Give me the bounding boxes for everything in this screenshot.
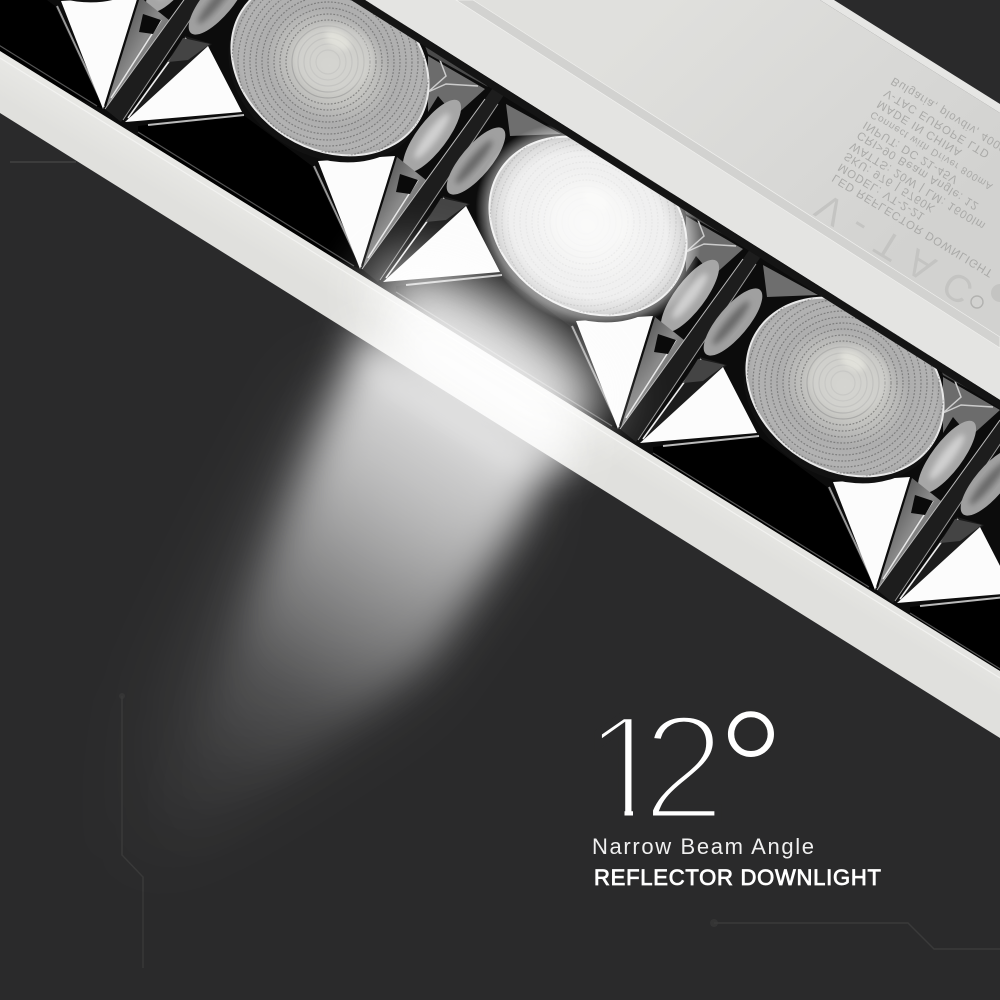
embossed label bbox=[809, 74, 1000, 312]
subtitle: beam angle: Narrow Beam Angle bbox=[592, 834, 814, 859]
module 2 bbox=[383, 99, 764, 442]
label line: model: MODEL: VT-2-21 bbox=[836, 160, 927, 223]
headline: 12 degrees: 1 bbox=[584, 683, 667, 851]
reflector modules bbox=[0, 0, 1000, 671]
label line: origin: MADE IN CHINA bbox=[875, 97, 965, 159]
channel glare bbox=[349, 231, 631, 459]
label line: company: V-TAC EUROPE LTD bbox=[882, 86, 992, 160]
label line: driver: Connect with Driver 800mA bbox=[869, 108, 995, 192]
mask: foot of digit one, right bbox=[633, 803, 650, 821]
headline: 12 degrees: 2 bbox=[642, 683, 725, 851]
circuit line: lower left bbox=[119, 693, 143, 968]
strip highlight line bbox=[0, 58, 1000, 678]
strip glare bbox=[400, 300, 570, 470]
label line: input: INPUT: DC 21-45V bbox=[861, 118, 961, 186]
lens glare on module 2 bbox=[476, 126, 699, 324]
subtitle: product: REFLECTOR DOWNLIGHT bbox=[594, 865, 881, 890]
white front strip bbox=[0, 51, 1000, 738]
circuit line: lower right bbox=[710, 919, 1000, 949]
soft outer beam bbox=[110, 380, 520, 900]
label line: cri: CRI>90 Beam Angle: 12 bbox=[855, 128, 981, 212]
housing highlight edge bbox=[820, 0, 1000, 113]
headline: 12 degrees bbox=[584, 675, 786, 870]
housing bevel bbox=[456, 0, 1000, 348]
module 0 bbox=[0, 0, 200, 122]
module 1 bbox=[125, 0, 506, 282]
circuit line: top left bbox=[10, 161, 76, 163]
module 4 bbox=[897, 453, 1000, 671]
housing step band bbox=[365, 0, 1000, 400]
light beam bbox=[160, 328, 560, 880]
logo: V-TAC: V-TAC bbox=[809, 184, 981, 312]
label line: watts: WATTS: 20W | LM: 1600lm bbox=[848, 139, 988, 232]
embossed round mark bbox=[991, 284, 1000, 302]
headline: 12 degrees: ° bbox=[716, 675, 786, 870]
mask: foot of digit one, left bbox=[590, 803, 624, 821]
fixture upper housing bbox=[473, 0, 1000, 337]
recessed reflector channel bbox=[0, 0, 1000, 671]
channel upper black edge bbox=[351, 0, 1000, 409]
trademark mark bbox=[971, 296, 983, 308]
label line: sku: SKU: 976 | 5760K bbox=[842, 149, 938, 214]
label line: product: LED REFLECTOR DOWNLIGHT bbox=[830, 171, 996, 279]
module 3 bbox=[640, 260, 1000, 603]
